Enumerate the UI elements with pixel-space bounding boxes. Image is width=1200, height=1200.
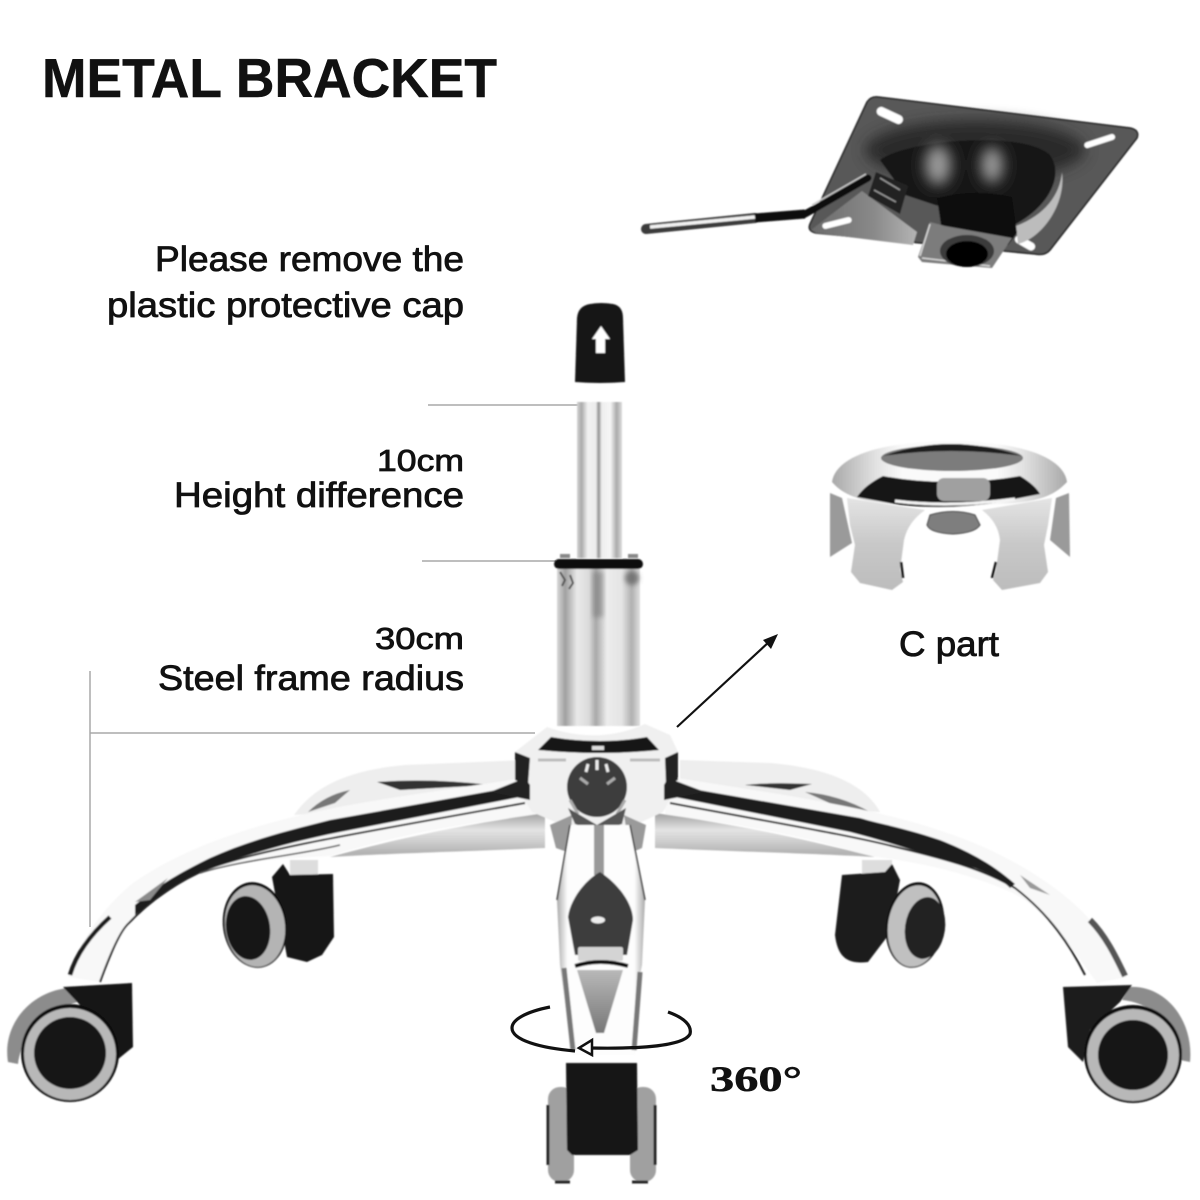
front right leg: [982, 498, 1052, 590]
rear left arm: [294, 760, 525, 815]
rotation arrow: [512, 1007, 690, 1055]
lever handle: [646, 174, 868, 229]
front right arm: [655, 776, 1127, 983]
socket: [940, 235, 994, 267]
caption: remove protective cap: Please remove the: [155, 240, 464, 279]
front left arm: [68, 776, 545, 982]
front center caster: [548, 1063, 656, 1182]
360 degree label: 360°: [710, 1059, 802, 1099]
gas lift cylinder: [554, 303, 643, 726]
rear tab: [927, 512, 980, 534]
C part label: C part: [899, 625, 999, 664]
rear right arm: [680, 760, 880, 812]
dark reflection band: [857, 476, 1040, 507]
caption: height difference: [174, 443, 464, 515]
bowl: [880, 140, 1055, 224]
front right caster: [1063, 985, 1190, 1103]
caption: steel frame radius: [158, 621, 464, 698]
center hub: [490, 724, 705, 853]
plate: [809, 97, 1138, 254]
metal seat plate bracket: [646, 97, 1138, 268]
caption: remove protective cap: [107, 240, 464, 325]
rear left caster: [217, 860, 334, 972]
outer cylinder: [557, 568, 640, 726]
top dome: [832, 441, 1067, 506]
title: METAL BRACKET: [42, 47, 497, 109]
caption: height difference: Height difference: [174, 476, 464, 515]
C part chrome cover: [830, 441, 1070, 590]
steel five-star base: [7, 724, 1190, 1182]
measurement lines: [90, 405, 580, 927]
side legs: [830, 493, 852, 557]
caption: steel frame radius: 30cm: [375, 621, 464, 656]
plate lower-left facet: [811, 191, 917, 245]
bowl light rim: [1016, 172, 1062, 244]
mounting slots: [822, 105, 1116, 252]
center black stem: [937, 193, 1017, 245]
front left caster: [7, 983, 133, 1102]
caption: steel frame radius: Steel frame radius: [158, 659, 464, 698]
front center arm: [557, 825, 645, 1055]
caption: remove protective cap: plastic protective cap: [107, 286, 464, 325]
square foot: [918, 222, 1012, 268]
plate shading: [865, 120, 1085, 180]
arrow from hub to C part: [677, 634, 778, 727]
spring block: [868, 172, 908, 214]
center opening: [881, 445, 1023, 471]
inner tube: [577, 402, 622, 558]
rear right caster: [835, 860, 950, 972]
protective cap: [575, 303, 625, 383]
caption: height difference: 10cm: [377, 443, 464, 478]
bowl highlights: [925, 145, 1003, 185]
black collar ring: [554, 559, 643, 569]
front left leg: [847, 498, 925, 590]
